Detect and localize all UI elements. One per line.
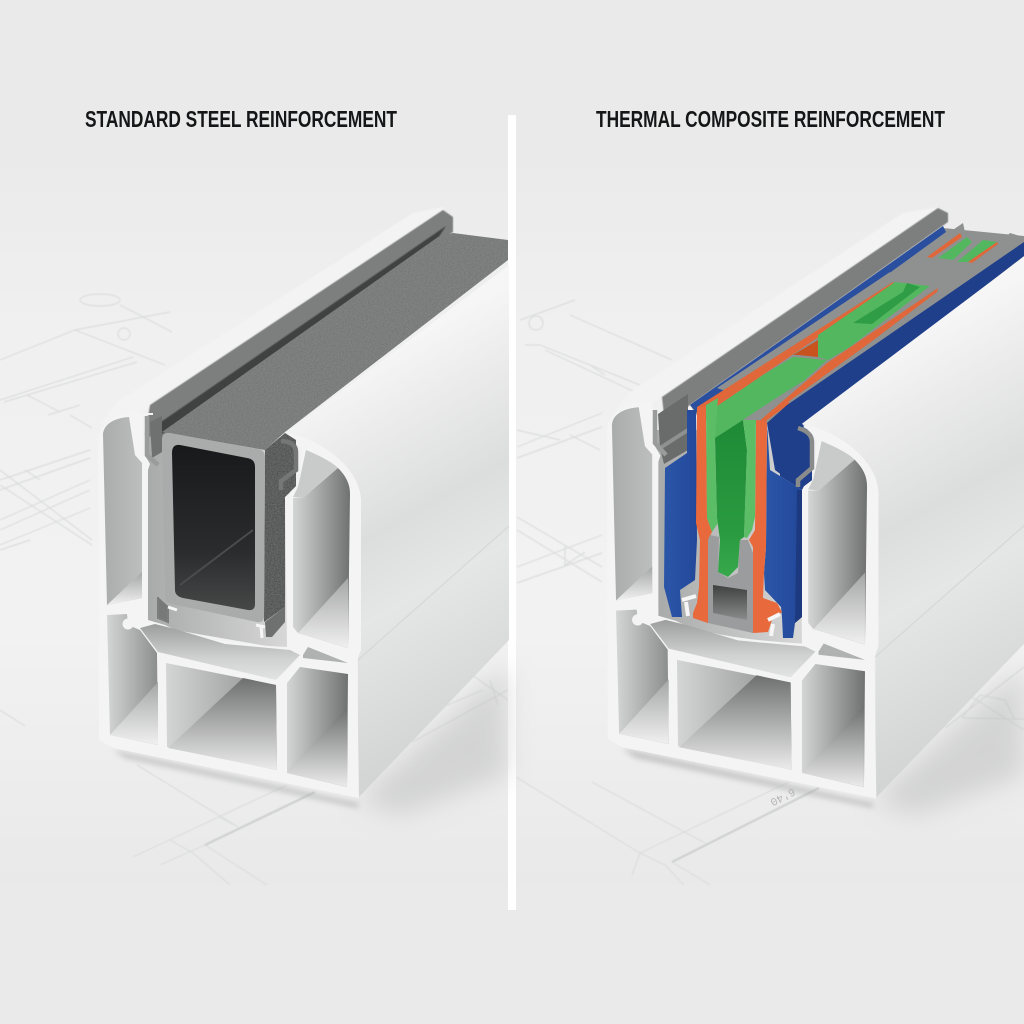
steel tube hollow [172, 445, 255, 610]
front edge shadow [622, 748, 873, 808]
right light green [743, 420, 756, 538]
rear orange layer [697, 282, 895, 413]
dark blue edge [795, 490, 802, 623]
lower green section [707, 357, 827, 440]
upper green slot [853, 283, 920, 324]
white profile body [98, 265, 509, 798]
gasket rail [145, 210, 453, 440]
right blue layer [764, 423, 802, 638]
right blueprint drawing [516, 300, 1024, 885]
top gray strip [890, 223, 965, 273]
white top flange [612, 207, 940, 415]
lower left clip [158, 597, 168, 622]
right orange layer [749, 420, 782, 633]
left gasket section [655, 394, 688, 464]
rear blue layer [690, 226, 946, 413]
heading: standard steel: STANDARD STEEL REINFORCEMENT [85, 106, 397, 132]
gasket rail [662, 208, 948, 425]
left gasket section [137, 414, 162, 465]
gray junction [887, 233, 1023, 288]
composite base fill [690, 228, 1024, 427]
steel tube front [162, 433, 265, 622]
lower orange layer [757, 288, 938, 440]
rear orange inner [793, 340, 818, 357]
panel: thermal composite profile [607, 207, 1024, 815]
white profile body [607, 251, 1024, 799]
gasket slot shadow [158, 226, 446, 434]
upper green section [818, 282, 930, 360]
central dark green [715, 420, 747, 577]
panel: standard steel profile [98, 207, 509, 815]
center divider [508, 115, 516, 910]
right top clip [798, 428, 812, 487]
lower white catches [682, 596, 780, 636]
left blue layer [664, 410, 697, 617]
top orange strips [927, 233, 998, 263]
blueprint dimension text: 6'40 [768, 784, 797, 807]
lower gray strip [788, 292, 947, 405]
steel side wall [264, 433, 296, 622]
dark blue behind clip [780, 420, 812, 490]
ground shadow right profile [873, 665, 1024, 815]
upper gray strip [717, 272, 893, 392]
opening behind reinforcement [655, 430, 806, 650]
gray center web [708, 535, 753, 633]
right paper panel [516, 150, 1024, 885]
steel interior floor edge [180, 530, 253, 585]
front edge shadow [113, 750, 358, 808]
diagonal dark blue layer [767, 242, 1024, 490]
right top clip [281, 441, 296, 490]
left orange layer [693, 407, 712, 623]
lower white catches [168, 607, 265, 638]
center hollow [713, 585, 747, 620]
white top flange [100, 207, 445, 425]
left paper panel [0, 150, 508, 885]
steel top surface [162, 233, 508, 450]
ground shadow left profile [358, 665, 507, 815]
lower right clip [265, 607, 285, 637]
left blueprint drawing [0, 294, 508, 885]
opening behind reinforcement [146, 430, 290, 650]
left light green [706, 398, 718, 532]
top green strips [938, 237, 997, 262]
